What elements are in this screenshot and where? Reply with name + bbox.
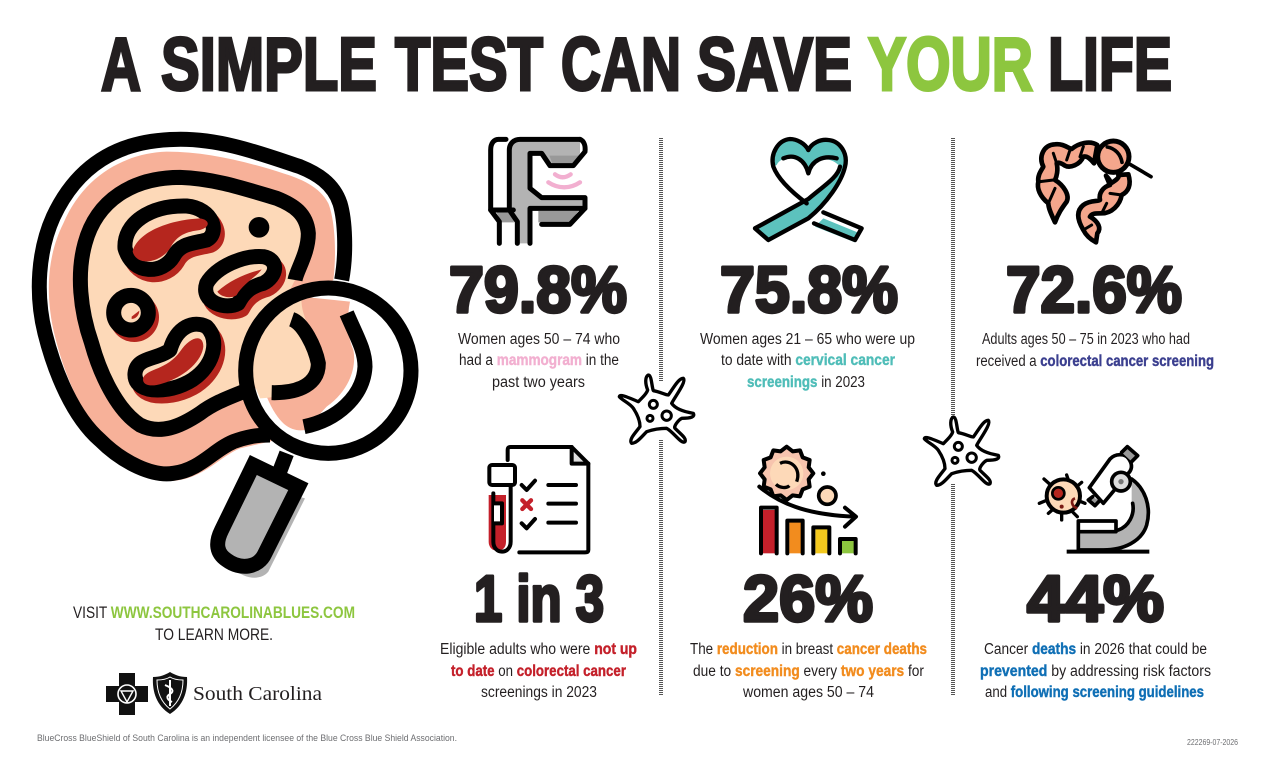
peach inner tissue — [81, 178, 306, 427]
caption: cervical: screenings in 2023 — [747, 374, 865, 391]
caption: mammogram: had a mammogram in the — [459, 352, 619, 369]
caption: colorectal — [976, 331, 1214, 370]
caption: prevention: and following screening guidelines — [985, 684, 1204, 701]
caption: mammogram — [458, 331, 620, 391]
stat: 79.8% — [449, 253, 627, 391]
title — [101, 22, 1172, 106]
caption: not up to date: to date on colorectal cancer — [451, 663, 626, 680]
magnifying lens — [246, 288, 411, 453]
caption: prevention — [980, 641, 1211, 701]
salmon outer tissue — [49, 152, 335, 481]
icon: checklist and test tube — [489, 447, 588, 552]
call to action: VISIT WWW.SOUTHCAROLINABLUES.COM — [73, 604, 355, 622]
caption: breast cancer: The reduction in breast cancer deaths — [690, 641, 927, 658]
caption: colorectal: received a colorectal cancer screening — [976, 353, 1214, 370]
caption: mammogram: Women ages 50 – 74 who — [458, 331, 620, 348]
caption: mammogram: past two years — [492, 374, 585, 391]
caption: not up to date: Eligible adults who were not up — [440, 641, 637, 658]
organelle 1 — [125, 206, 217, 275]
stat: 44% — [980, 562, 1211, 701]
title: SAVE — [697, 22, 852, 106]
stat: 79.8%: 79.8% — [449, 253, 627, 326]
illustration: cell under magnifying glass — [39, 139, 411, 578]
caption: breast cancer: women ages 50 – 74 — [742, 684, 874, 701]
organelle 3 — [110, 293, 159, 342]
organelle 2 — [206, 257, 279, 312]
caption: prevention: prevented by addressing risk factors — [980, 663, 1211, 680]
icon: declining bar chart — [759, 447, 856, 553]
caption: breast cancer — [690, 641, 927, 701]
icon: colon with magnifier — [1038, 141, 1151, 242]
cell outer wall — [39, 139, 345, 474]
caption: cervical — [700, 331, 915, 391]
icon: shield — [153, 672, 187, 714]
stat: 72.6%: 72.6% — [1006, 253, 1182, 326]
call to action — [73, 604, 355, 644]
stat: 26%: 26% — [743, 562, 873, 635]
title: SIMPLE — [161, 22, 377, 106]
caption: breast cancer: due to screening every two years for — [693, 663, 924, 680]
icon: awareness ribbon heart — [755, 139, 862, 242]
title: TEST — [395, 22, 543, 106]
title: A — [101, 22, 141, 106]
caption: prevention: Cancer deaths in 2026 that could be — [984, 641, 1207, 658]
stat: 1 in 3 — [440, 562, 637, 701]
stat: 1 in 3: 1 in 3 — [474, 562, 604, 635]
stat: 26% — [690, 562, 927, 701]
title: YOUR — [868, 22, 1033, 106]
icon: cross — [106, 673, 148, 715]
caption: cervical: to date with cervical cancer — [721, 352, 895, 369]
lens handle — [218, 453, 298, 566]
caption: cervical: Women ages 21 – 65 who were up — [700, 331, 915, 348]
disclaimer: BlueCross BlueShield of South Carolina is an independent licensee of the Blue Cross Blue Shield Association. — [37, 733, 457, 744]
job code: 222269-07-2026 — [1187, 738, 1238, 747]
caption: colorectal: Adults ages 50 – 75 in 2023 who had — [982, 331, 1190, 348]
dividers — [661, 138, 953, 696]
nucleus dot — [249, 217, 269, 238]
title: LIFE — [1048, 22, 1172, 106]
stat: 75.8%: 75.8% — [720, 253, 898, 326]
icon: virus left — [619, 375, 694, 443]
icon: microscope and germ — [1039, 447, 1149, 552]
stat: 44%: 44% — [1027, 562, 1164, 635]
logo: South Carolina — [193, 683, 322, 705]
icon: virus right — [924, 417, 999, 485]
title: CAN — [561, 22, 681, 106]
call to action: TO LEARN MORE. — [155, 626, 273, 644]
caption: not up to date — [440, 641, 637, 701]
stat: 72.6% — [976, 253, 1214, 370]
icon: mammogram machine — [491, 139, 585, 243]
organelle 4 — [135, 324, 218, 396]
caption: not up to date: screenings in 2023 — [481, 684, 597, 701]
handle shadow — [233, 493, 305, 578]
logo — [106, 672, 322, 715]
cell inner wall — [80, 177, 308, 429]
stat: 75.8% — [700, 253, 915, 391]
